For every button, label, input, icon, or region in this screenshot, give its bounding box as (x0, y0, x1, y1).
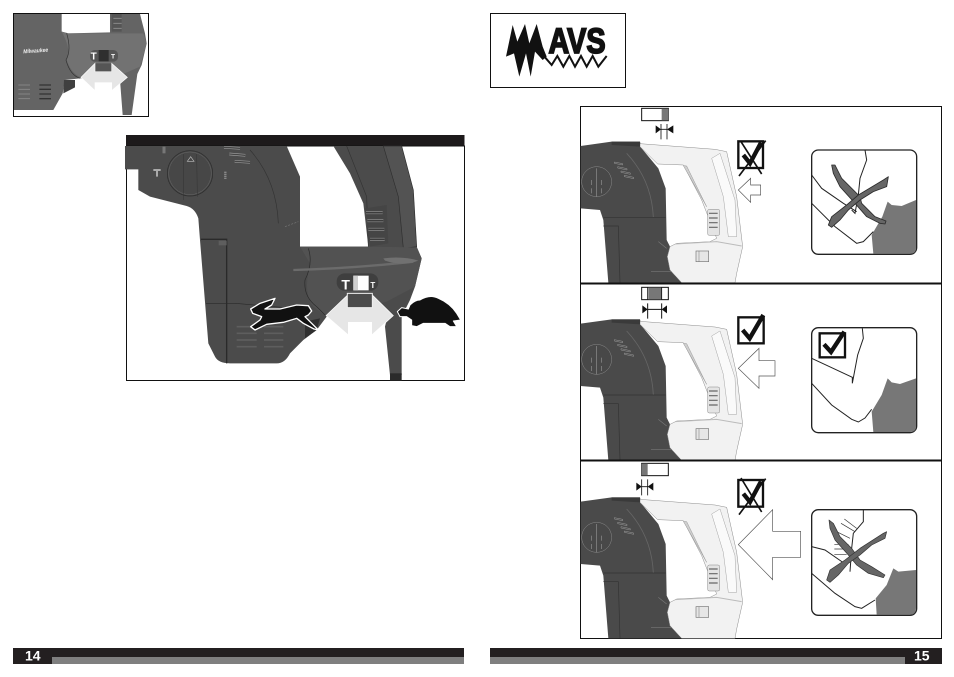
illustration: drill close-up: T (111, 54, 115, 61)
illustration: drill with speed switch (125, 146, 461, 381)
illustration: drill (581, 142, 743, 283)
card: wrong arm pressure (812, 150, 917, 254)
icon: checkbox (738, 315, 764, 343)
footer: page 15 (490, 648, 942, 664)
illustration: drill close-up (14, 14, 147, 115)
divider (580, 460, 942, 462)
arrow: double-headed switch direction (81, 63, 127, 91)
heading bar (126, 135, 464, 146)
panel: main drill illustration (125, 135, 465, 381)
panel: too little pressure (581, 108, 917, 283)
panel: vibration comparison frame (580, 106, 942, 638)
indicator: damper position centre (642, 287, 668, 319)
divider (580, 282, 942, 284)
panel: small drill thumbnail (14, 14, 148, 116)
arrow: double-headed speed direction (326, 294, 393, 335)
mark: cross (827, 520, 887, 582)
page number: 15 (914, 648, 930, 664)
illustration: drill close-up: T (91, 51, 97, 62)
icon: crossed checkbox (738, 141, 766, 176)
mark: cross (828, 165, 888, 227)
illustration: drill with speed switch: T (341, 276, 350, 292)
brand label: Milwaukee (23, 48, 48, 55)
icon: rabbit (fast) (251, 298, 318, 330)
arrow: light force (738, 178, 761, 202)
footer: page 14 (13, 648, 464, 664)
panel: too much pressure (581, 463, 917, 638)
indicator: damper position right (636, 463, 668, 495)
arrow: medium force (738, 348, 775, 388)
illustration: drill with speed switch: T (370, 281, 375, 290)
icon: checkbox (820, 332, 845, 357)
page number: 14 (25, 648, 41, 664)
card: wrong arm pressure with vibration (812, 510, 917, 615)
logo: AVS (490, 14, 626, 88)
icon: tortoise (slow) (397, 297, 461, 327)
logo wordmark: AVS (548, 22, 606, 61)
speed switch (353, 276, 369, 290)
icon: crossed checkbox (738, 478, 766, 515)
icon: vibration spikes (506, 24, 547, 77)
icon: damped wave (545, 56, 607, 67)
arrow: strong force (738, 510, 801, 580)
card: correct arm pressure (812, 328, 917, 433)
illustration: drill (581, 497, 743, 638)
indicator: damper position left (642, 108, 673, 139)
panel: correct pressure (581, 287, 917, 460)
illustration: drill (581, 319, 743, 460)
